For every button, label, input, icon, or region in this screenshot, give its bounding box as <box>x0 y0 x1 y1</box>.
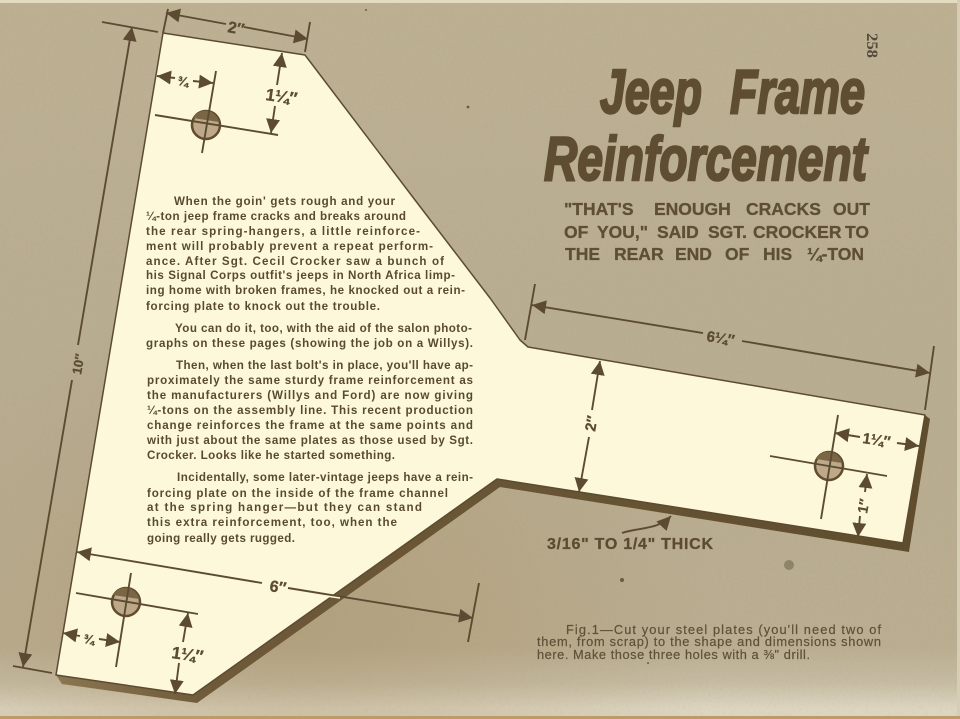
dimension: top hole 1 1/4 inch: 1¼″ <box>264 85 299 108</box>
body text: change reinforces the frame at the same points and <box>147 419 473 432</box>
body text: going really gets rugged. <box>147 532 295 545</box>
body text: this extra reinforcement, too, when the <box>147 516 398 529</box>
body text: graphs on these pages (showing the job on a Willys). <box>146 337 473 350</box>
subtitle: OF <box>564 222 589 242</box>
figure caption: here. Make those three holes with a ⅜" drill. <box>537 647 810 662</box>
subtitle: ¼-TON <box>807 244 864 264</box>
body text: ¼-ton jeep frame cracks and breaks around <box>146 210 406 223</box>
body text: You can do it, too, with the aid of the salon photo- <box>175 322 472 335</box>
subtitle: CROCKER <box>753 222 842 242</box>
title: Frame <box>730 58 865 127</box>
dimension: bottom hole inset three quarters: ¾ <box>83 631 97 648</box>
dimension: height 10 inches <box>13 22 158 673</box>
dimension: 6 inches: 6″ <box>268 578 288 598</box>
dimension: bottom hole inset three quarters <box>63 631 120 648</box>
body text <box>146 195 473 545</box>
dimension: right hole 1 inch: 1″ <box>854 497 873 515</box>
page number: 258 <box>863 33 880 58</box>
body text: with just about the same plates as those used by Sgt. <box>146 434 473 447</box>
subtitle <box>564 199 870 264</box>
body text: proximately the same sturdy frame reinforcement as <box>147 374 473 387</box>
body text: Incidentally, some later-vintage jeeps have a rein- <box>177 471 473 484</box>
figure caption: them, from scrap) to the shape and dimensions shown <box>537 634 881 649</box>
dimension: right hole 1 1/4 inch: 1¼″ <box>861 430 892 451</box>
body text: the rear spring-hangers, a little reinforce- <box>146 225 420 238</box>
subtitle: YOU," <box>597 222 648 242</box>
subtitle: CRACKS <box>746 199 821 219</box>
subtitle: ENOUGH <box>654 199 731 219</box>
dimension: top width 2 inches <box>163 9 310 52</box>
body text: his Signal Corps outfit's jeeps in North Africa limp- <box>146 269 455 282</box>
body text: forcing plate on the inside of the frame channel <box>147 487 448 500</box>
dimension: top hole 1 1/4 inch <box>264 53 299 133</box>
thickness callout: 3/16" TO 1/4" THICK <box>547 536 713 553</box>
body text: the manufacturers (Willys and Ford) are now giving <box>147 389 473 402</box>
dimension: right hole 1 inch <box>854 474 873 537</box>
hole: bottom <box>76 573 198 667</box>
subtitle: OF <box>725 244 750 264</box>
dimension: top width 2 inches: 2″ <box>226 19 246 39</box>
figure caption: Fig.1—Cut your steel plates (you'll need two of <box>566 622 881 637</box>
dimension: 6 1/4 inches: 6¼″ <box>705 328 736 349</box>
subtitle: REAR <box>614 244 664 264</box>
dimension: 6 inches <box>77 552 479 642</box>
hole: top <box>155 71 278 153</box>
dimension: height 10 inches: 10″ <box>69 353 88 376</box>
title: Jeep <box>600 58 702 127</box>
title <box>544 58 869 194</box>
body text: Then, when the last bolt's in place, you'll have ap- <box>176 359 473 372</box>
thickness callout <box>547 516 713 553</box>
dimension: 6 1/4 inches <box>525 284 934 410</box>
body text: When the goin' gets rough and your <box>174 195 395 208</box>
dimension: bottom hole 1 1/4 inch: 1¼″ <box>170 643 205 666</box>
subtitle: OUT <box>833 199 870 219</box>
subtitle: TO <box>845 222 869 242</box>
body text: at the spring hanger—but they can stand <box>147 501 422 514</box>
dimension: top hole inset three quarters: ¾ <box>177 73 191 90</box>
figure caption <box>537 622 881 662</box>
dimension: bottom hole 1 1/4 inch <box>170 613 205 694</box>
body text: ance. After Sgt. Cecil Crocker saw a bunch of <box>146 255 444 268</box>
dimension: top hole inset three quarters <box>157 73 213 90</box>
subtitle: THE <box>565 244 600 264</box>
body text: ment will probably prevent a repeat perform- <box>146 240 433 253</box>
dimension: arm width 2 inches: 2″ <box>582 414 602 433</box>
subtitle: HIS <box>763 244 792 264</box>
dimension: arm width 2 inches <box>579 361 602 492</box>
subtitle: END <box>675 244 712 264</box>
body text: ¼-tons on the assembly line. This recent production <box>147 404 473 417</box>
subtitle: "THAT'S <box>564 199 634 219</box>
dimension: right hole 1 1/4 inch <box>835 430 919 451</box>
hole: right <box>770 415 887 519</box>
body text: forcing plate to knock out the trouble. <box>146 300 380 313</box>
body text: Crocker. Looks like he started something. <box>147 449 395 462</box>
body text: ing home with broken frames, he knocked out a rein- <box>146 284 465 297</box>
subtitle: SGT. <box>708 222 747 242</box>
subtitle: SAID <box>657 222 699 242</box>
